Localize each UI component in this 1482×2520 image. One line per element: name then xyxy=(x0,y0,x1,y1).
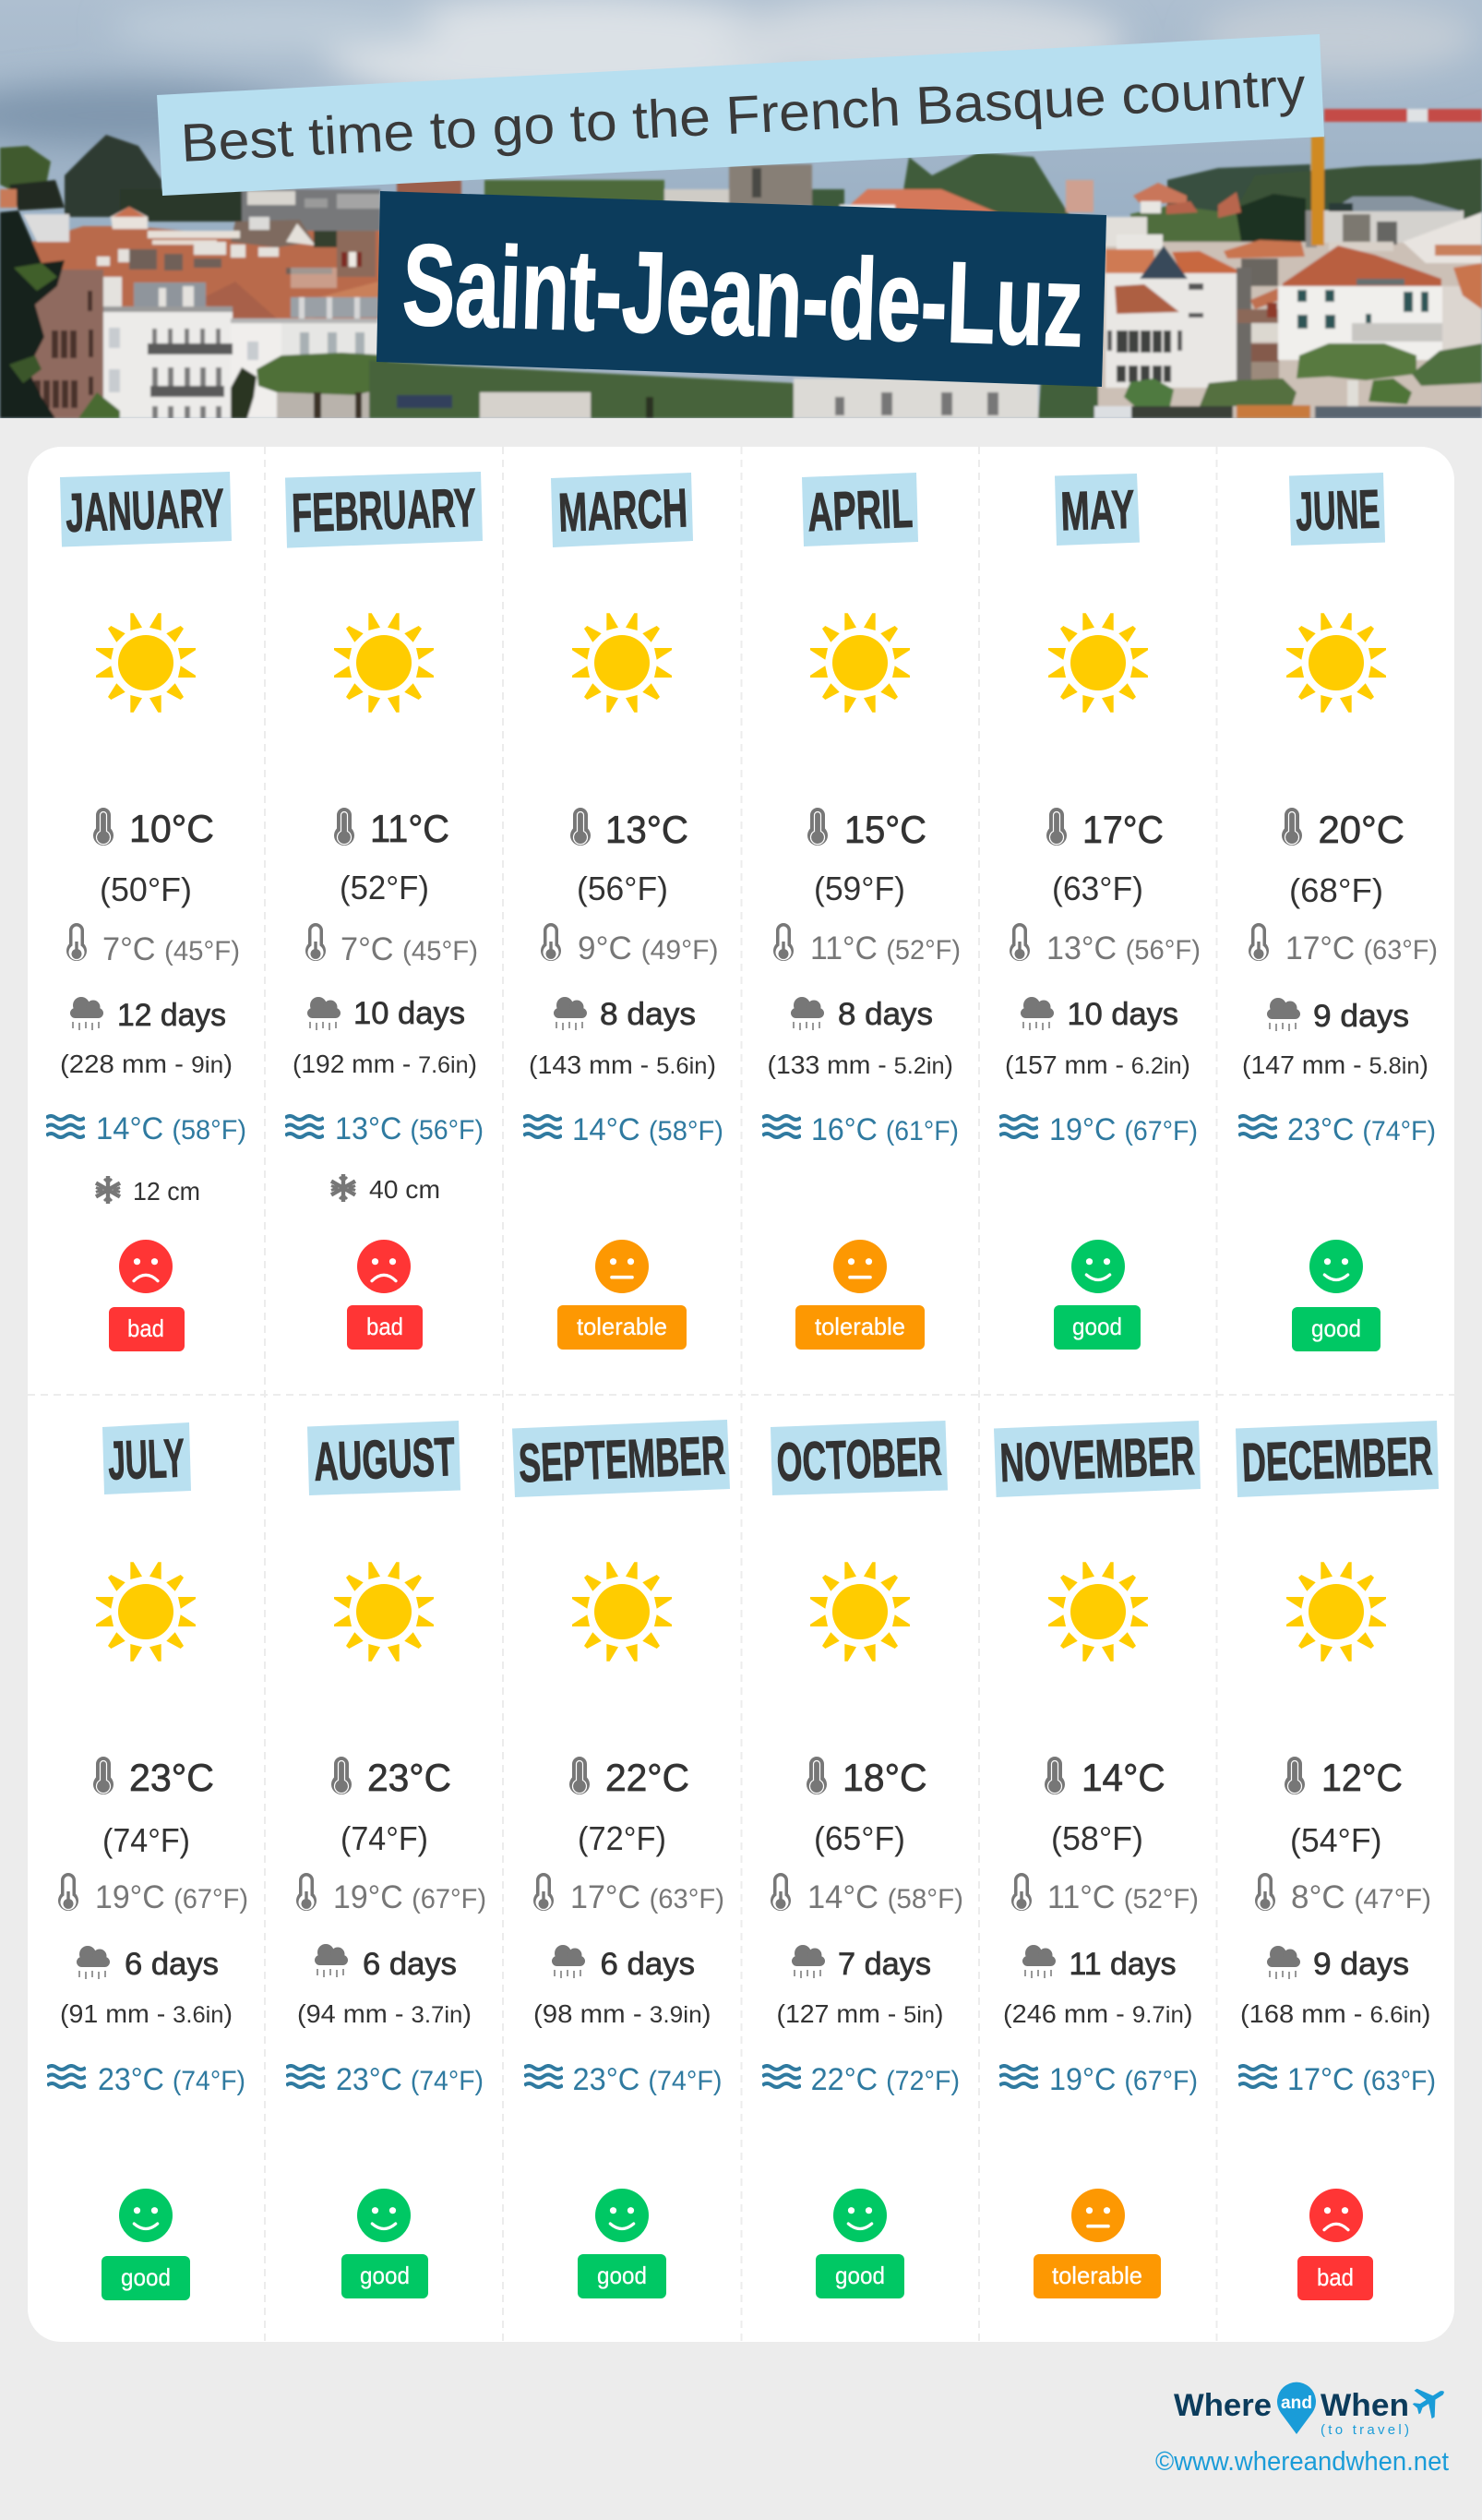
icon: thermometer xyxy=(1285,1757,1305,1794)
icon: rain xyxy=(791,997,824,1030)
panel: February xyxy=(285,472,484,1350)
icon: low thermometer xyxy=(1255,1873,1275,1911)
rating badge xyxy=(1054,1305,1141,1350)
icon: low thermometer xyxy=(296,1873,317,1911)
icon: waves xyxy=(762,1116,801,1137)
icon: rain xyxy=(315,1944,348,1977)
high fahrenheit: (74°F) xyxy=(341,1819,428,1857)
big left tree xyxy=(0,210,65,418)
rating badge xyxy=(557,1305,687,1350)
panel: September xyxy=(512,1420,730,2298)
rating badge: good xyxy=(121,2263,171,2291)
icon: snowflake xyxy=(331,1174,355,1202)
sea temperature: 16°C (61°F) xyxy=(811,1112,959,1147)
icon: waves xyxy=(1238,1116,1277,1137)
rating badge: tolerable xyxy=(577,1313,667,1340)
icon: happy face xyxy=(833,2189,887,2242)
rainy days: 7 days xyxy=(838,1947,931,1982)
high temperature: 22°C xyxy=(605,1756,689,1799)
month label xyxy=(512,1420,730,1497)
month label: MAY xyxy=(1060,479,1136,542)
rainfall: (94 mm - 3.7in) xyxy=(297,1999,472,2028)
rainfall: (133 mm - 5.2in) xyxy=(768,1050,953,1079)
icon: happy face xyxy=(595,2189,649,2242)
icon: waves xyxy=(523,1116,562,1137)
sea temperature: 13°C (56°F) xyxy=(335,1111,484,1146)
low temperature: 11°C (52°F) xyxy=(810,930,961,966)
icon: sun xyxy=(810,1562,910,1662)
high fahrenheit: (68°F) xyxy=(1289,871,1383,909)
sea temperature: 19°C (67°F) xyxy=(1049,1112,1198,1147)
month label xyxy=(771,1421,948,1495)
rainy days: 8 days xyxy=(600,997,696,1032)
rating badge: good xyxy=(597,2262,647,2289)
icon: sun xyxy=(1048,1562,1148,1662)
icon: rain xyxy=(1267,1946,1300,1979)
snowfall: 40 cm xyxy=(369,1175,440,1204)
icon: rain xyxy=(70,997,103,1030)
low temperature: 11°C (52°F) xyxy=(1047,1879,1199,1915)
hillside houses left xyxy=(242,189,380,234)
banner: title xyxy=(376,191,1106,387)
panel: August xyxy=(286,1421,486,2298)
rating badge xyxy=(795,1305,925,1350)
high temperature: 18°C xyxy=(843,1756,927,1799)
icon: sun xyxy=(572,613,672,713)
icon: thermometer xyxy=(93,1757,114,1794)
sea temperature: 23°C (74°F) xyxy=(1287,1112,1436,1147)
high fahrenheit: (74°F) xyxy=(102,1821,190,1859)
icon: plane xyxy=(1407,2378,1452,2423)
icon: thermometer xyxy=(1046,808,1067,846)
icon: thermometer xyxy=(331,1757,352,1794)
icon: low thermometer xyxy=(533,1873,554,1911)
month label: OCTOBER xyxy=(775,1426,943,1493)
sea temperature: 14°C (58°F) xyxy=(96,1111,246,1146)
icon: sad face xyxy=(1309,2189,1363,2242)
icon: thermometer xyxy=(334,808,354,846)
rainfall: (143 mm - 5.6in) xyxy=(529,1050,716,1079)
icon: sad face xyxy=(357,1240,411,1293)
sea temperature: 14°C (58°F) xyxy=(572,1112,723,1147)
icon: snowflake xyxy=(96,1176,120,1204)
high fahrenheit: (50°F) xyxy=(100,870,192,908)
icon: rain xyxy=(554,997,587,1030)
rainfall: (157 mm - 6.2in) xyxy=(1005,1050,1190,1079)
icon: low thermometer xyxy=(1010,923,1030,961)
panel: July xyxy=(47,1422,248,2300)
month label xyxy=(102,1422,191,1494)
panel: November xyxy=(994,1421,1201,2298)
rating badge: good xyxy=(1311,1314,1361,1342)
icon: waves xyxy=(999,2066,1038,2087)
rating badge: bad xyxy=(1317,2263,1354,2291)
icon: low thermometer xyxy=(305,923,326,961)
crane xyxy=(1324,109,1482,122)
title text: Saint-Jean-de-Luz xyxy=(400,221,1085,371)
high fahrenheit: (59°F) xyxy=(814,870,905,907)
month label: SEPTEMBER xyxy=(518,1424,726,1494)
month label xyxy=(994,1421,1201,1497)
month label xyxy=(285,472,483,548)
high temperature: 10°C xyxy=(129,807,214,850)
snowfall: 12 cm xyxy=(133,1177,200,1206)
white buildings xyxy=(103,306,233,418)
high temperature: 17°C xyxy=(1082,808,1164,851)
icon: low thermometer xyxy=(1249,923,1269,961)
month label: MARCH xyxy=(557,477,688,544)
rainy days: 9 days xyxy=(1313,1947,1409,1982)
sea temperature: 22°C (72°F) xyxy=(811,2062,960,2097)
rainy days: 10 days xyxy=(1067,997,1178,1032)
brick building xyxy=(23,270,103,418)
high temperature: 20°C xyxy=(1318,808,1404,851)
rainfall: (168 mm - 6.6in) xyxy=(1240,1999,1430,2028)
icon: rain xyxy=(1021,997,1054,1030)
high temperature: 14°C xyxy=(1082,1756,1165,1799)
panel: January xyxy=(46,472,246,1351)
website url: ©www.whereandwhen.net xyxy=(1155,2447,1449,2477)
subtitle text: Best time to go to the French Basque country xyxy=(179,56,1307,174)
icon: sun xyxy=(1048,613,1148,713)
rainy days: 6 days xyxy=(363,1947,457,1982)
icon: waves xyxy=(47,2066,86,2087)
rainy days: 12 days xyxy=(117,998,226,1033)
icon: rain xyxy=(792,1945,825,1978)
low temperature: 8°C (47°F) xyxy=(1291,1879,1431,1915)
month label xyxy=(1289,473,1385,546)
icon: rain xyxy=(307,997,341,1030)
icon: happy face xyxy=(1309,1240,1363,1293)
high fahrenheit: (63°F) xyxy=(1052,870,1143,907)
foreground trees left xyxy=(277,390,388,418)
rating badge: bad xyxy=(127,1314,164,1342)
icon: rain xyxy=(552,1945,585,1978)
panel: May xyxy=(999,474,1201,1350)
icon: sun xyxy=(334,613,434,713)
rainy days: 8 days xyxy=(838,997,933,1032)
rating badge xyxy=(347,1305,423,1350)
high fahrenheit: (72°F) xyxy=(578,1819,666,1857)
rating badge: bad xyxy=(366,1313,403,1340)
icon: waves xyxy=(286,2066,325,2087)
month label: NOVEMBER xyxy=(998,1425,1196,1494)
rainy days: 6 days xyxy=(600,1947,695,1982)
low temperature: 9°C (49°F) xyxy=(578,930,718,966)
high fahrenheit: (54°F) xyxy=(1290,1821,1382,1859)
high temperature: 23°C xyxy=(129,1756,214,1799)
rating badge xyxy=(109,1307,185,1351)
icon: thermometer xyxy=(807,1757,827,1794)
sea temperature: 23°C (74°F) xyxy=(336,2062,484,2097)
rating badge: tolerable xyxy=(815,1313,905,1340)
rainfall: (147 mm - 5.8in) xyxy=(1242,1050,1428,1079)
icon: rain xyxy=(1022,1945,1056,1978)
rainy days: 9 days xyxy=(1313,999,1409,1034)
month label: AUGUST xyxy=(313,1426,456,1493)
rating badge: good xyxy=(360,2262,410,2289)
rating badge: tolerable xyxy=(1052,2262,1142,2289)
rainy days: 6 days xyxy=(125,1947,219,1982)
panel: March xyxy=(523,473,723,1350)
month label: JULY xyxy=(107,1427,185,1492)
sea temperature: 17°C (63°F) xyxy=(1287,2062,1436,2097)
icon: sun xyxy=(1286,1562,1386,1662)
banner: subtitle xyxy=(157,34,1324,196)
icon: low thermometer xyxy=(773,923,794,961)
rating badge: good xyxy=(835,2262,885,2289)
rainy days: 10 days xyxy=(353,996,465,1031)
rating badge xyxy=(1297,2256,1373,2300)
icon: neutral face xyxy=(595,1240,649,1293)
month label xyxy=(307,1421,460,1495)
panel: April xyxy=(762,473,961,1350)
icon: thermometer xyxy=(1282,808,1302,846)
high temperature: 23°C xyxy=(367,1756,451,1799)
icon: low thermometer xyxy=(58,1873,78,1911)
month label: JANUARY xyxy=(65,477,225,544)
icon: rain xyxy=(1267,998,1300,1031)
low temperature: 17°C (63°F) xyxy=(1285,930,1438,966)
rainfall: (246 mm - 9.7in) xyxy=(1003,1999,1192,2028)
high fahrenheit: (56°F) xyxy=(577,870,668,907)
month label: FEBRUARY xyxy=(291,477,477,544)
logo: Where and When: When xyxy=(1321,2388,1409,2423)
rainfall: (91 mm - 3.6in) xyxy=(60,1999,233,2028)
icon: happy face xyxy=(357,2189,411,2242)
low temperature: 19°C (67°F) xyxy=(95,1879,248,1915)
icon: sun xyxy=(1286,613,1386,713)
icon: sun xyxy=(96,1562,196,1662)
low temperature: 19°C (67°F) xyxy=(333,1879,486,1915)
icon: thermometer xyxy=(570,808,591,846)
sea temperature: 23°C (74°F) xyxy=(572,2062,722,2097)
icon: waves xyxy=(46,1116,85,1137)
rating badge: good xyxy=(1072,1313,1122,1340)
rating badge xyxy=(1034,2254,1161,2298)
icon: low thermometer xyxy=(1011,1873,1032,1911)
month label: JUNE xyxy=(1295,478,1380,543)
rainy days: 11 days xyxy=(1069,1947,1176,1982)
low temperature: 14°C (58°F) xyxy=(807,1879,963,1915)
sea temperature: 23°C (74°F) xyxy=(98,2062,245,2097)
month label xyxy=(60,472,232,546)
high fahrenheit: (65°F) xyxy=(814,1819,905,1857)
high temperature: 13°C xyxy=(605,808,688,851)
high fahrenheit: (58°F) xyxy=(1051,1819,1143,1857)
icon: neutral face xyxy=(833,1240,887,1293)
low temperature: 13°C (56°F) xyxy=(1046,930,1201,966)
low temperature: 17°C (63°F) xyxy=(570,1879,724,1915)
icon: thermometer xyxy=(1045,1757,1065,1794)
foreground trees right xyxy=(1297,343,1416,380)
month label xyxy=(551,473,693,547)
icon: thermometer xyxy=(807,808,828,846)
below title banner xyxy=(369,360,794,418)
rainfall: (228 mm - 9in) xyxy=(60,1050,233,1078)
month label xyxy=(1055,474,1140,546)
sea temperature: 19°C (67°F) xyxy=(1049,2062,1198,2097)
icon: waves xyxy=(762,2066,801,2087)
icon: map pin xyxy=(1277,2382,1316,2434)
icon: waves xyxy=(999,1116,1038,1137)
low temperature: 7°C (45°F) xyxy=(341,931,478,967)
icon: happy face xyxy=(119,2189,173,2242)
rating badge xyxy=(816,2254,904,2298)
rating badge xyxy=(102,2256,190,2300)
icon: thermometer xyxy=(93,808,114,846)
icon: sad face xyxy=(119,1240,173,1293)
icon: low thermometer xyxy=(771,1873,791,1911)
logo: Where and When: Where xyxy=(1174,2388,1272,2423)
icon: waves xyxy=(1238,2066,1277,2087)
month label xyxy=(802,473,918,546)
low temperature: 7°C (45°F) xyxy=(102,931,240,967)
high temperature: 12°C xyxy=(1321,1756,1403,1799)
month label: APRIL xyxy=(807,478,914,543)
icon: waves xyxy=(285,1116,324,1137)
icon: thermometer xyxy=(569,1757,590,1794)
icon: neutral face xyxy=(1071,2189,1125,2242)
icon: happy face xyxy=(1071,1240,1125,1293)
hills and back trees xyxy=(1167,164,1310,212)
logo: Where and When xyxy=(1174,2378,1452,2438)
rainfall: (127 mm - 5in) xyxy=(777,1999,943,2028)
panel: calendar xyxy=(28,447,1454,2342)
logo: Where and When: (to travel) xyxy=(1321,2422,1409,2438)
icon: sun xyxy=(334,1562,434,1662)
rating badge xyxy=(1292,1307,1380,1351)
panel: October xyxy=(762,1421,963,2298)
icon: low thermometer xyxy=(541,923,561,961)
icon: sun xyxy=(96,613,196,713)
icon: sun xyxy=(810,613,910,713)
rating badge xyxy=(341,2254,428,2298)
icon: sun xyxy=(572,1562,672,1662)
rating badge xyxy=(578,2254,666,2298)
panel: June xyxy=(1238,473,1438,1351)
right town xyxy=(1133,183,1187,203)
rainfall: (192 mm - 7.6in) xyxy=(293,1050,477,1078)
high temperature: 15°C xyxy=(844,808,926,851)
icon: rain xyxy=(77,1946,110,1979)
rainfall: (98 mm - 3.9in) xyxy=(533,1999,711,2028)
panel: December xyxy=(1236,1421,1439,2300)
left town roofs xyxy=(32,226,380,318)
header photo: town view xyxy=(0,0,1482,418)
icon: waves xyxy=(524,2066,563,2087)
high fahrenheit: (52°F) xyxy=(340,869,429,906)
icon: map pin: and xyxy=(1281,2394,1312,2413)
high temperature: 11°C xyxy=(370,807,449,850)
icon: low thermometer xyxy=(66,923,87,961)
